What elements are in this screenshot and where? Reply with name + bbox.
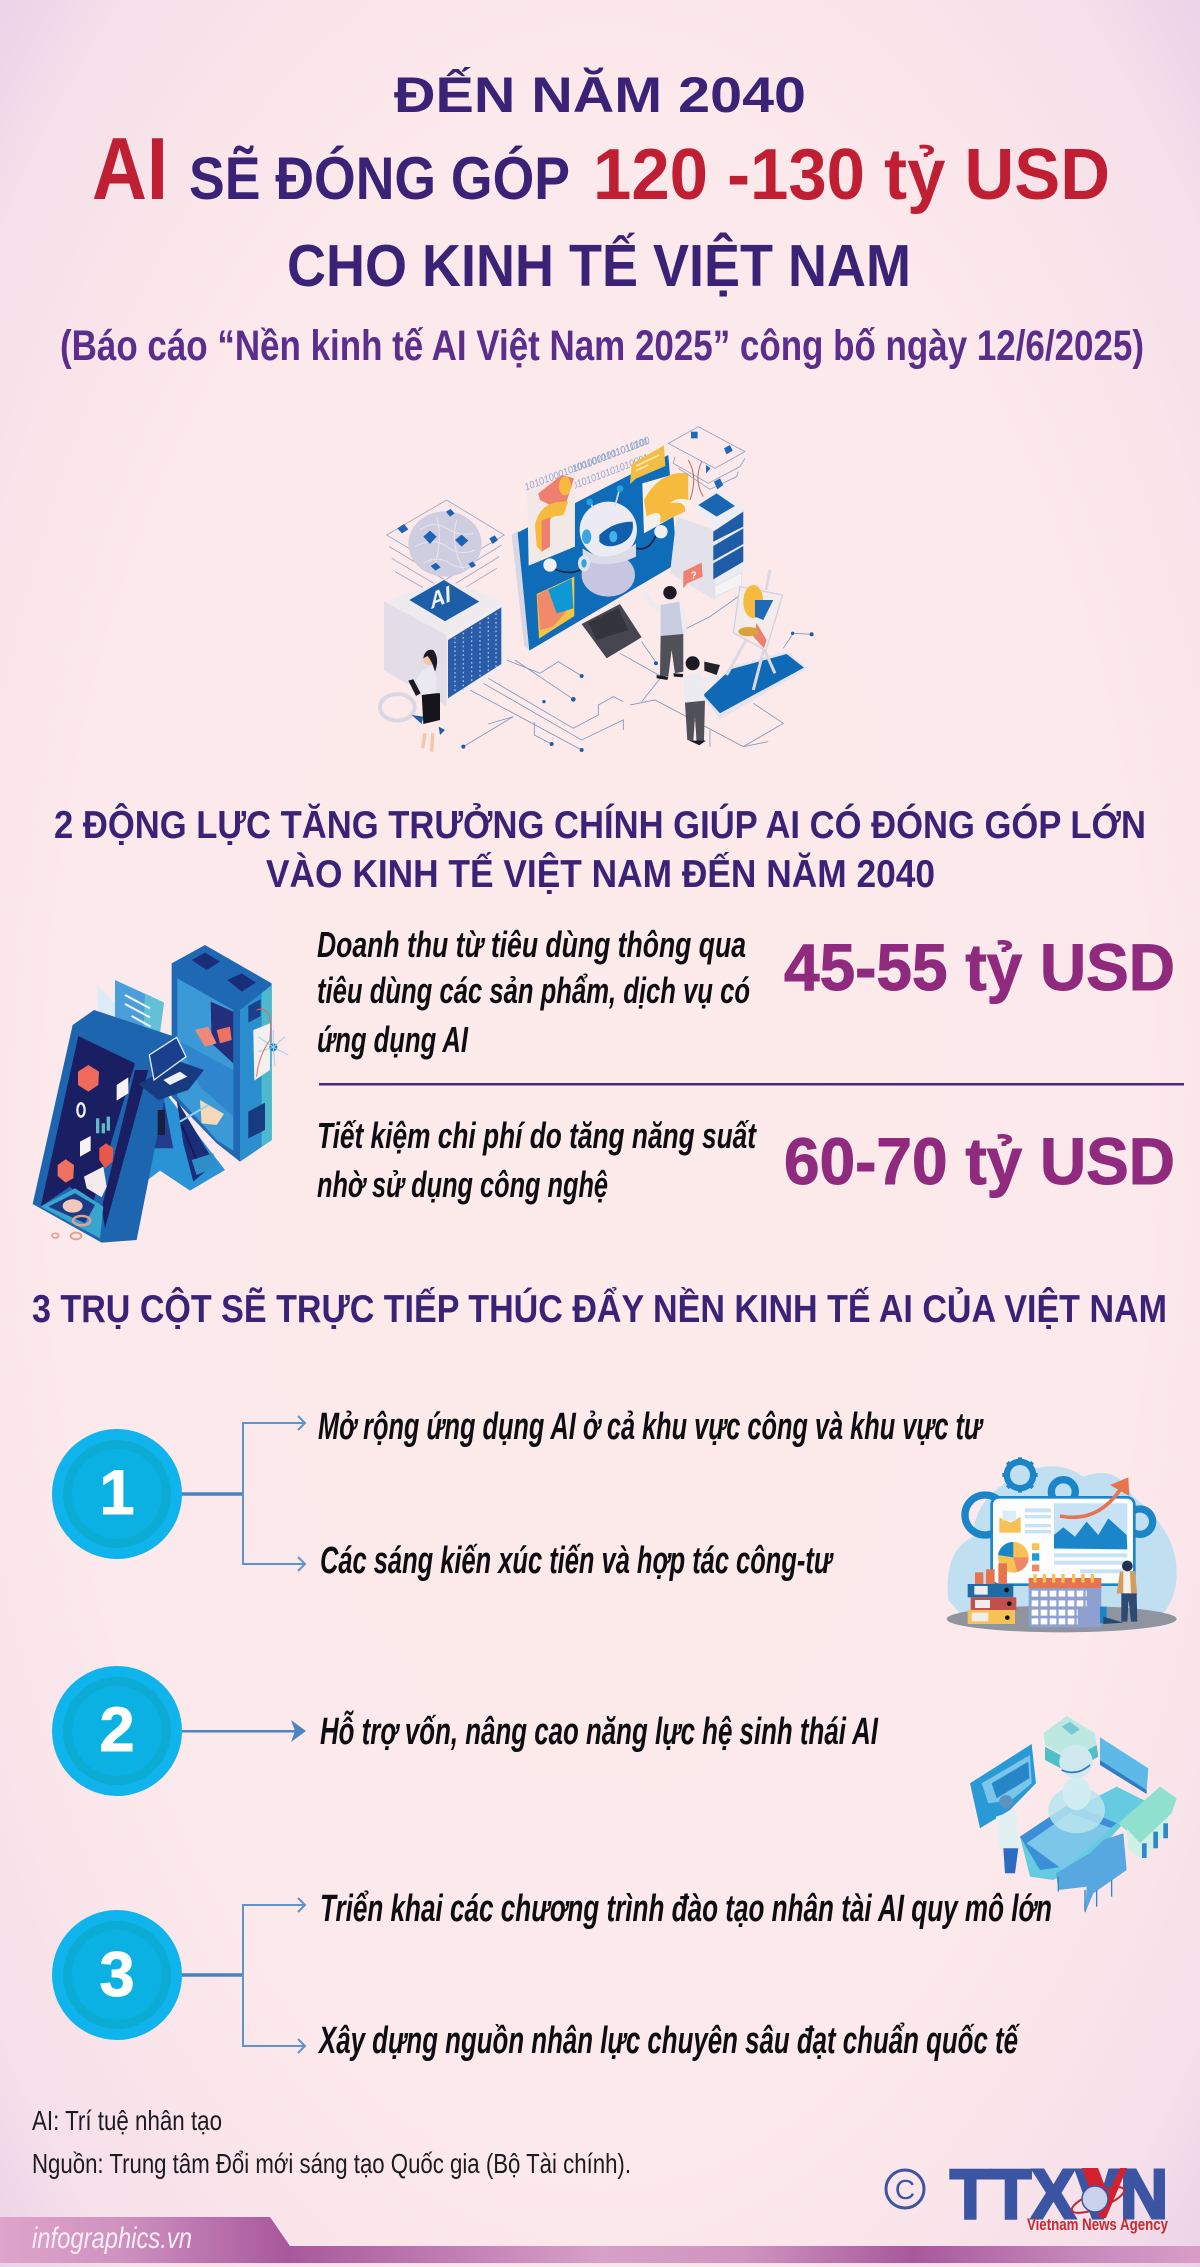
pillar 1 — [52, 1406, 984, 1582]
illustration: robot workstation — [970, 1716, 1177, 1913]
title line 2 — [92, 119, 1110, 218]
driver 1 text: Doanh thu từ tiêu dùng thông qua — [317, 924, 746, 965]
agency wordmark: TTXVN — [950, 2155, 1168, 2233]
number badge 3: 3 — [99, 1940, 135, 2010]
driver 1 value: 45-55 tỷ USD — [784, 930, 1175, 1004]
divider line — [319, 1083, 1184, 1086]
pillar 2 item: Hỗ trợ vốn, nâng cao năng lực hệ sinh thái AI — [320, 1709, 879, 1753]
illustration: AI robot hero scene — [380, 427, 814, 752]
question bubble — [683, 563, 703, 588]
title line 3: CHO KINH TẾ VIỆT NAM — [287, 232, 911, 299]
speech document — [97, 980, 164, 1045]
driver 2 text — [317, 1115, 757, 1205]
binary text: 10101000101010001011010100 — [523, 435, 652, 493]
footnote and source — [32, 2105, 631, 2179]
logo: TTXVN — [886, 2155, 1168, 2234]
section heading: growth drivers: VÀO KINH TẾ VIỆT NAM ĐẾN NĂM 2040 — [266, 852, 935, 896]
easel and platform — [702, 570, 808, 719]
AI cube — [384, 579, 505, 706]
server rack — [670, 517, 715, 600]
illustration: AI robot hero scene: ? — [691, 570, 697, 581]
desk with laptop — [138, 1037, 224, 1175]
footnote and source: AI: Trí tuệ nhân tạo — [32, 2105, 222, 2136]
title line 2: SẼ ĐÓNG GÓP — [189, 145, 570, 212]
copyright symbol: C — [895, 2174, 915, 2205]
illustration: 3D AI letters — [33, 945, 288, 1243]
title line 2: AI — [92, 119, 168, 218]
copyright symbol — [886, 2170, 924, 2208]
monitor — [512, 531, 531, 651]
footer band — [0, 2217, 1200, 2263]
number badge 2: 2 — [99, 1695, 135, 1765]
man with tablet — [683, 656, 720, 745]
footnote and source: Nguồn: Trung tâm Đổi mới sáng tạo Quốc gia (Bộ Tài chính). — [32, 2148, 631, 2179]
number badge 3 — [52, 1910, 182, 2040]
pillar 1 item 2: Các sáng kiến xúc tiến và hợp tác công-tư — [320, 1540, 834, 1582]
letter A — [33, 1010, 225, 1243]
driver 2 value: 60-70 tỷ USD — [784, 1124, 1175, 1198]
robot — [543, 485, 668, 597]
title line 2: 120 -130 tỷ USD — [593, 135, 1110, 215]
site name: infographics.vn — [32, 2222, 192, 2255]
section heading: growth drivers — [54, 802, 1146, 896]
arrow 2 — [182, 1720, 306, 1742]
letter I — [172, 945, 288, 1162]
driver 1 text — [317, 924, 750, 1060]
branching arrows 3 — [182, 1898, 305, 2053]
illustration: dashboard with gears — [947, 1457, 1177, 1632]
title — [60, 67, 1144, 370]
woman with tablet — [380, 650, 445, 752]
man pointing at screen — [645, 586, 685, 680]
driver 1 text: ứng dụng AI — [317, 1019, 469, 1060]
brain with data layers — [387, 500, 504, 600]
pillar 2 — [52, 1666, 879, 1796]
floating panels — [527, 472, 575, 566]
branching arrows 1 — [182, 1416, 305, 1571]
number badge 1 — [52, 1429, 182, 1559]
data layers — [668, 427, 745, 489]
number badge 1: 1 — [99, 1458, 135, 1528]
binary text: 0101010101010001 — [570, 453, 651, 492]
AI cube: AI — [430, 579, 451, 614]
title line 1: ĐẾN NĂM 2040 — [394, 67, 806, 123]
driver 1 text: tiêu dùng các sản phẩm, dịch vụ có — [317, 970, 750, 1011]
pillar 3 — [52, 1888, 1052, 2062]
driver 2 text: nhờ sử dụng công nghệ — [317, 1164, 608, 1205]
binary text: 1001010101011101 — [570, 436, 651, 475]
number badge 2 — [52, 1666, 182, 1796]
monitor stand — [582, 604, 642, 658]
driver 2 text: Tiết kiệm chi phí do tăng năng suất — [317, 1115, 757, 1156]
